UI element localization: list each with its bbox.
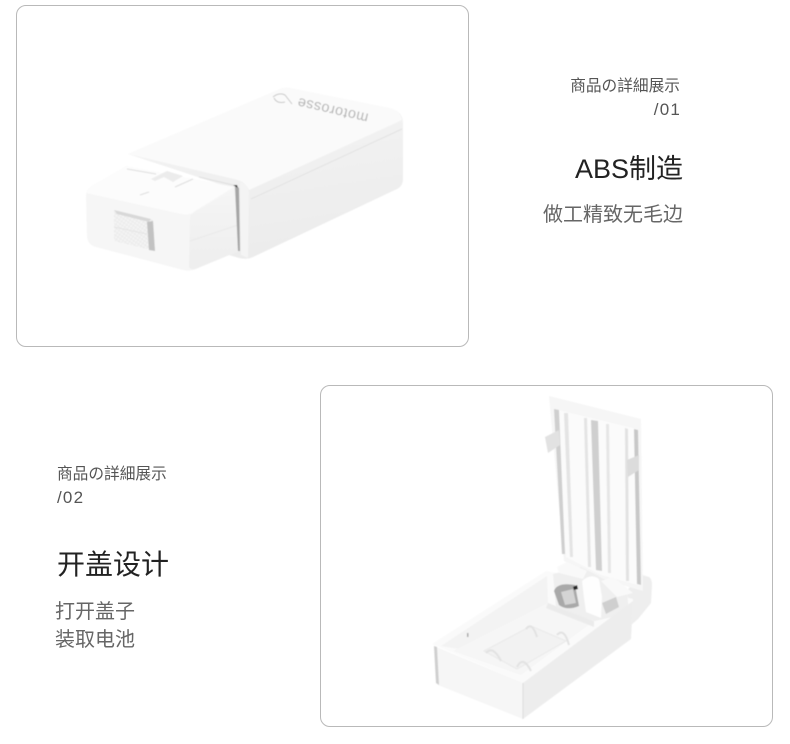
text block: detail 02 xyxy=(55,465,169,651)
battery contact xyxy=(554,584,579,608)
case top face xyxy=(128,88,402,190)
top details xyxy=(151,171,183,182)
heading: flip lid design: 开盖设计 xyxy=(57,549,169,580)
panel: open case product photo xyxy=(320,385,773,727)
panel: closed case product photo xyxy=(16,5,469,347)
text block: detail 01 xyxy=(543,77,683,226)
seam line xyxy=(251,129,402,199)
label: number 02: /02 xyxy=(57,488,84,507)
case body xyxy=(128,88,403,259)
slider end block xyxy=(86,166,239,271)
white centre block xyxy=(582,576,602,618)
switch button xyxy=(114,211,155,251)
tray side face xyxy=(523,601,633,719)
dark gap between slider and case xyxy=(235,186,240,251)
description: fine workmanship: 做工精致无毛边 xyxy=(543,204,683,226)
description: open lid, load battery: 装取电池 xyxy=(55,629,135,651)
illustration: closed white case xyxy=(86,88,403,271)
hinge pieces xyxy=(557,562,587,579)
battery seat xyxy=(484,626,566,669)
heading: ABS manufacturing: ABS制造 xyxy=(575,154,683,184)
slider side face xyxy=(189,189,239,269)
lid ribs xyxy=(554,409,565,554)
rear block xyxy=(627,574,652,625)
inner left wall xyxy=(441,576,548,651)
slider top face xyxy=(86,166,234,215)
brand mark: motorosse xyxy=(296,94,370,126)
case front lip xyxy=(240,182,249,258)
description: open lid, load battery: 打开盖子 xyxy=(55,601,135,623)
tray rim and interior xyxy=(432,571,633,683)
spring detail xyxy=(602,597,619,614)
tray floor xyxy=(453,603,594,675)
label: product details: 商品の詳細展示 xyxy=(57,466,167,483)
compartment wall xyxy=(546,603,594,627)
compartment back xyxy=(553,567,629,621)
tray front face xyxy=(434,646,523,719)
label: product details: 商品の詳細展示 xyxy=(570,78,680,95)
lid xyxy=(549,396,643,591)
label: number 01: /01 xyxy=(654,100,681,119)
description: open lid, load battery xyxy=(55,601,135,651)
lid clips xyxy=(545,430,560,453)
illustration: open white case xyxy=(432,396,652,719)
